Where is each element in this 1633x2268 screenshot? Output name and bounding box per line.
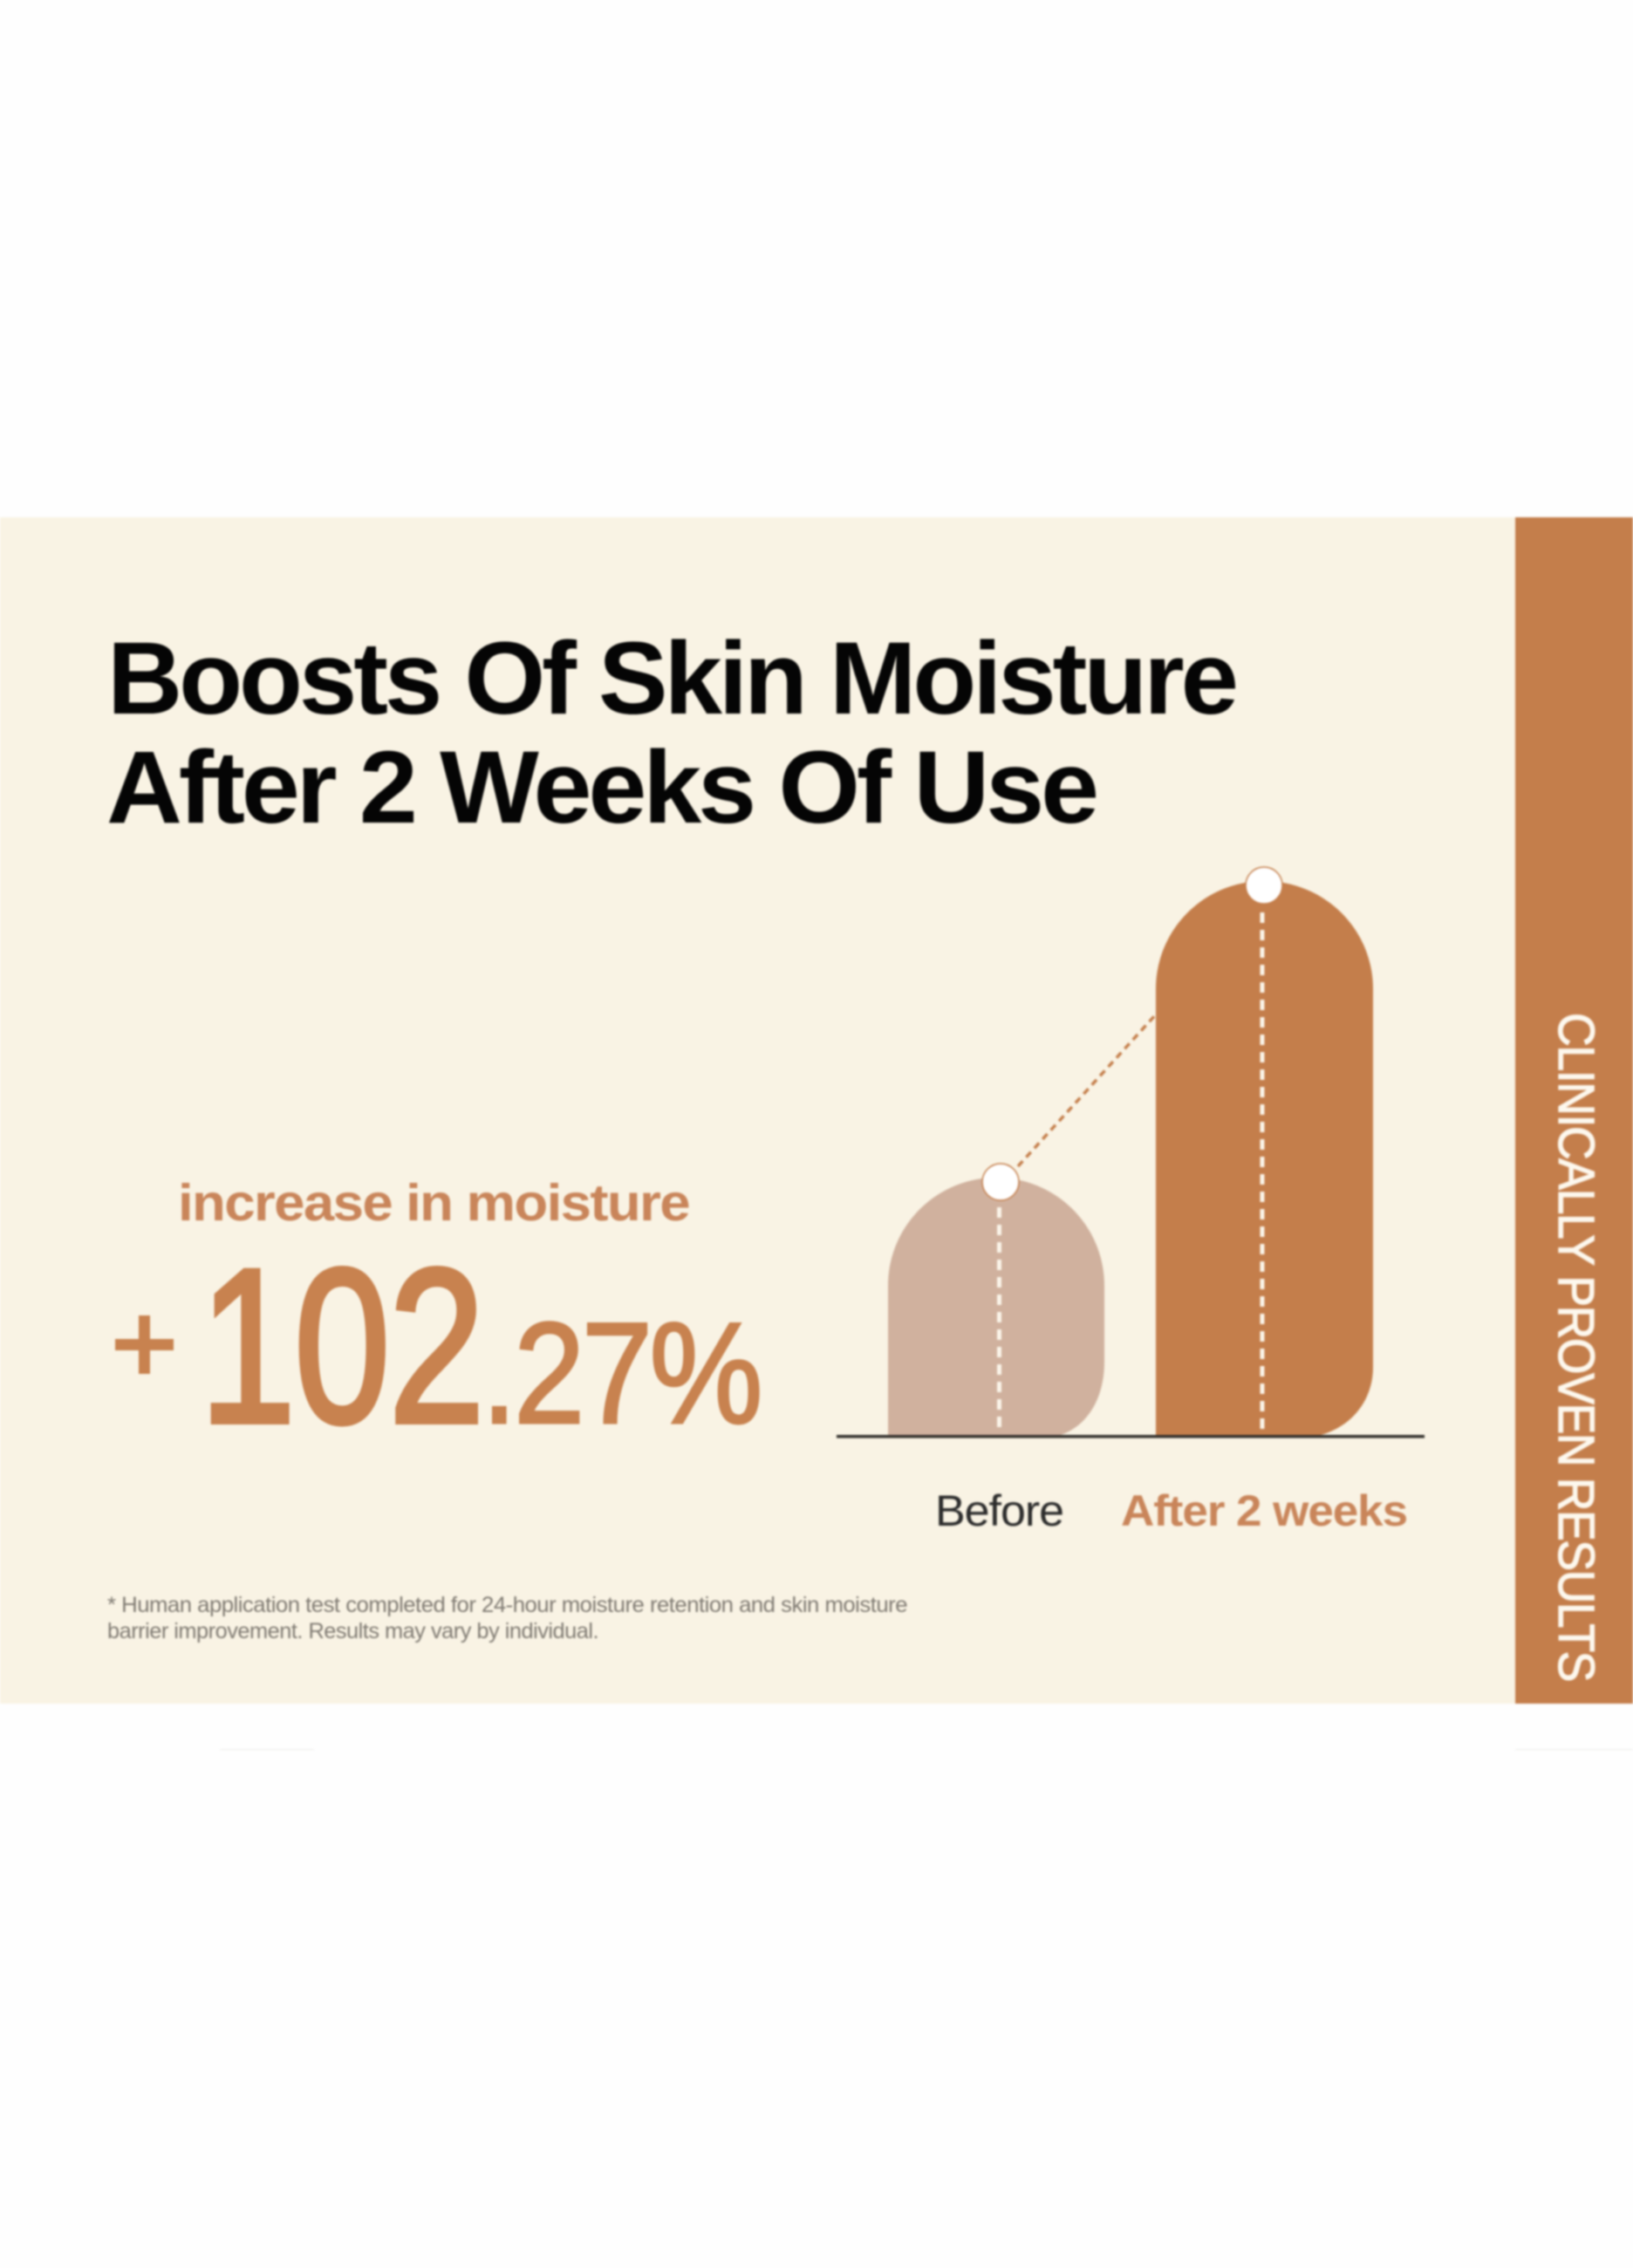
title: After 2 Weeks Of Use [106, 730, 1096, 845]
axis label: before: Before [935, 1486, 1063, 1535]
dashed marker: before [997, 1207, 1001, 1431]
panel: side band [1515, 517, 1633, 1704]
footnote [107, 1593, 907, 1643]
point: after [1246, 867, 1282, 904]
point: before [982, 1164, 1019, 1200]
big stat: +102.27% [115, 1224, 760, 1469]
panel: cream background [0, 517, 1515, 1704]
chart baseline [837, 1435, 1425, 1438]
side band label: CLINICALLY PROVEN RESULTS [1548, 1013, 1604, 1681]
dashed marker: after [1260, 912, 1265, 1431]
subheading: increase in moisture: increase in moisture [178, 1174, 689, 1232]
bar: before [888, 1178, 1104, 1435]
title: Boosts Of Skin Moisture [107, 621, 1235, 736]
bar chart [837, 867, 1425, 1438]
big stat: +102.27%: 102 [200, 1224, 483, 1469]
footnote: barrier improvement. Results may vary by individual. [107, 1619, 598, 1643]
footnote: * Human application test completed for 24-hour moisture retention and skin moisture [107, 1593, 907, 1617]
title [106, 621, 1235, 845]
bar: after 2 weeks [1156, 881, 1373, 1435]
axis label: after 2 weeks: After 2 weeks [1121, 1486, 1407, 1535]
big stat: +102.27%: .27% [482, 1293, 760, 1453]
diagonal dotted connector [1018, 1014, 1156, 1166]
